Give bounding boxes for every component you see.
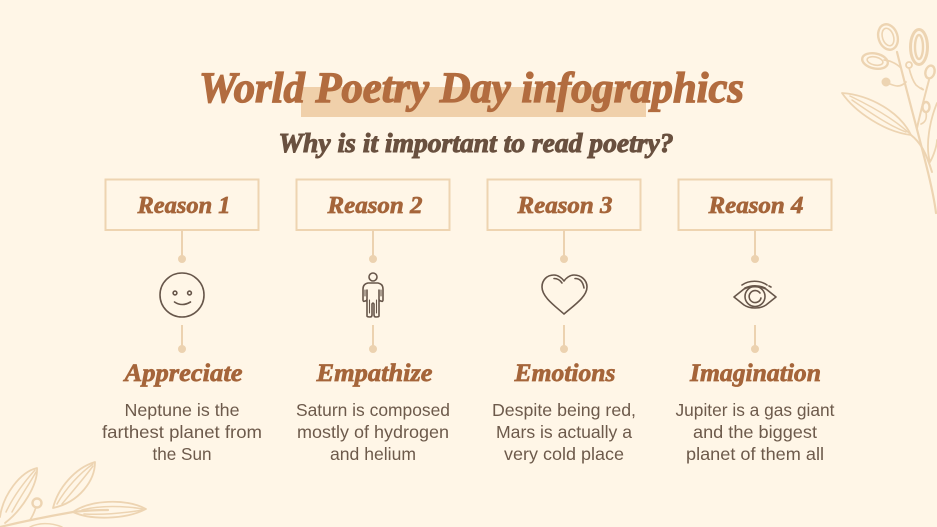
icon: person <box>363 273 383 317</box>
icon: eye <box>734 281 776 308</box>
description: and helium <box>330 444 416 464</box>
heading: Emotions: Emotions <box>513 360 616 387</box>
heading: Empathize: Empathize <box>315 360 432 387</box>
heading: Appreciate: Appreciate <box>122 360 242 387</box>
connector bottom <box>178 325 186 353</box>
description: Neptune is the <box>124 400 240 420</box>
floral decoration: bottom left <box>0 462 146 527</box>
description: and the biggest <box>693 422 817 442</box>
column 4: Imagination <box>676 180 835 464</box>
description: Saturn is composed <box>296 400 450 420</box>
description: farthest planet from <box>102 422 262 442</box>
reason 1 box: Reason 1 <box>136 193 230 219</box>
connector top <box>751 230 759 263</box>
reason 2 box <box>296 180 450 230</box>
description: mostly of hydrogen <box>297 422 449 442</box>
description: the Sun <box>152 444 212 464</box>
reason 3 box <box>488 180 640 230</box>
description: Mars is actually a <box>496 422 632 442</box>
connector bottom <box>560 325 568 353</box>
reason 4 box: Reason 4 <box>707 193 804 219</box>
description <box>676 400 835 464</box>
description: Despite being red, <box>492 400 636 420</box>
reason 3 box: Reason 3 <box>516 193 612 219</box>
title highlight bar <box>301 87 646 117</box>
description <box>492 400 636 464</box>
connector top <box>178 230 186 263</box>
reason 2 box: Reason 2 <box>326 193 422 219</box>
description <box>102 400 262 464</box>
column 3: Emotions <box>488 180 640 464</box>
description <box>296 400 450 464</box>
connector bottom <box>369 325 377 353</box>
connector top <box>560 230 568 263</box>
reason 1 box <box>106 180 258 230</box>
column 1: Appreciate <box>102 180 262 464</box>
description: Jupiter is a gas giant <box>676 400 835 420</box>
floral decoration: top right <box>842 22 937 213</box>
icon: smiley face <box>160 273 204 317</box>
connector bottom <box>751 325 759 353</box>
reason 4 box <box>678 180 832 230</box>
description: very cold place <box>504 444 624 464</box>
description: planet of them all <box>686 444 824 464</box>
title: World Poetry Day infographics <box>199 65 744 112</box>
connector top <box>369 230 377 263</box>
subtitle: Why is it important to read poetry? <box>278 128 674 158</box>
column 2: Empathize <box>296 180 450 464</box>
icon: heart <box>542 275 587 314</box>
heading: Imagination: Imagination <box>689 360 821 387</box>
